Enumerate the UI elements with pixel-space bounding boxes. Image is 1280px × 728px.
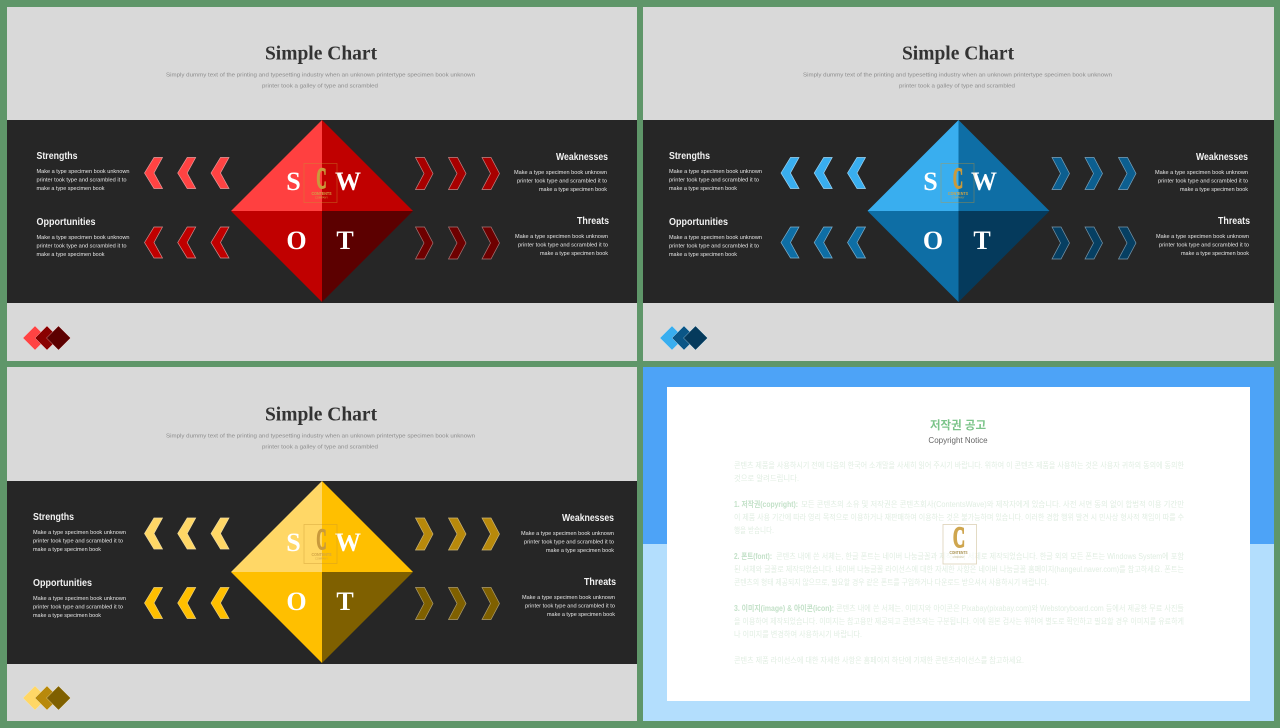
text: Opportunities: [33, 578, 126, 619]
text: Weaknesses: printer took type and scrambled it to: [517, 178, 607, 184]
text: Threats: make a type specimen book: [1181, 251, 1249, 257]
logo watermark: COMPANY: [315, 556, 328, 560]
notice clause 1: 행을 받습니다.: [734, 525, 774, 535]
logo watermark: [943, 521, 976, 564]
logo watermark: C: [953, 162, 963, 195]
notice clause 3: 나 이미지를 변경하여 사용하시기 바랍니다.: [734, 629, 862, 639]
notice title: 저작권 공고: [930, 418, 986, 432]
text: Threats: Threats: [1218, 216, 1250, 227]
SWOT diamond: [231, 120, 413, 302]
text: Opportunities: Opportunities: [36, 217, 96, 228]
arrows: right bottom: [416, 227, 500, 259]
notice subtitle: Copyright Notice: [928, 436, 988, 445]
subtitle: Simply dummy text of the printing and typesetting industry when an unknown printertype specimen book unknown: [166, 72, 475, 78]
arrows: left bottom: [144, 588, 229, 618]
text: Weaknesses: make a type specimen book: [546, 548, 614, 554]
notice clause 2: [734, 551, 1185, 587]
dark band: [643, 120, 1274, 303]
text: Opportunities: Opportunities: [33, 578, 92, 589]
text: Weaknesses: Make a type specimen book unknown: [1155, 170, 1248, 176]
arrows: left top: [144, 158, 229, 188]
SWOT diamond: S: [286, 167, 301, 196]
text: Threats: Make a type specimen book unknown: [1156, 234, 1249, 240]
text: Threats: [515, 216, 609, 257]
subtitle: printer took a galley of type and scrambled: [262, 444, 378, 450]
text: Opportunities: [36, 217, 130, 258]
SWOT diamond: O: [286, 587, 307, 616]
text: Strengths: Strengths: [669, 151, 710, 162]
text: Weaknesses: make a type specimen book: [539, 187, 607, 193]
subtitle: [166, 434, 475, 450]
SWOT diamond: T: [973, 226, 991, 255]
notice intro: [734, 460, 1185, 483]
text: Threats: printer took type and scrambled it to: [525, 604, 615, 610]
SWOT diamond: [231, 481, 413, 663]
text: Strengths: [669, 151, 762, 192]
SWOT diamond: W: [335, 167, 361, 196]
subtitle: printer took a galley of type and scrambled: [262, 84, 378, 90]
notice clause 1: 1. 저작권(copyright):: [734, 499, 798, 509]
text: Opportunities: printer took type and scrambled it to: [36, 244, 126, 250]
logo watermark: COMPANY: [315, 196, 328, 200]
notice clause 2: 콘텐츠의 형태 제공되지 않으므로, 필요할 경우 같은 폰트를 구입하거나 다운로드 받으셔서 사용하시기 바랍니다.: [734, 577, 1049, 587]
text: Weaknesses: [521, 513, 614, 554]
text: Strengths: [36, 151, 130, 192]
text: Weaknesses: printer took type and scrambled it to: [524, 540, 614, 546]
notice clause 1: 모든 콘텐츠의 소유 및 저작권은 콘텐츠회사(ContentsWave)와 제작자에게 있습니다. 사전 서면 동의 없이 합법적 이용 기간만: [801, 499, 1185, 509]
arrows: left bottom: [144, 227, 229, 258]
text: Strengths: make a type specimen book: [33, 547, 101, 553]
notice clause 3: 을 이용하여 제작되었습니다. 이미지는 참고용만 제공되고 콘텐츠와는 구분됩니다. 이에 원본 검사는 위하여 별도로 확인하고 필요할 경우 이미지를 유료하게: [734, 616, 1184, 626]
subtitle: printer took a galley of type and scrambled: [899, 84, 1015, 90]
arrows: right bottom: [416, 588, 500, 620]
text: Opportunities: [669, 217, 762, 258]
SWOT diamond: T: [336, 587, 354, 616]
arrows: left bottom: [781, 227, 866, 258]
arrows: left top: [781, 158, 866, 188]
SWOT diamond: T: [336, 226, 354, 255]
text: Opportunities: Make a type specimen book unknown: [36, 235, 130, 241]
text: Strengths: [33, 512, 126, 553]
notice clause 1: [734, 499, 1185, 535]
text: Threats: printer took type and scrambled it to: [1159, 242, 1249, 248]
text: Weaknesses: [514, 152, 608, 193]
text: Weaknesses: Make a type specimen book unknown: [514, 170, 607, 176]
text: Threats: [522, 577, 616, 618]
text: Strengths: Make a type specimen book unknown: [36, 169, 130, 175]
logo watermark: [941, 162, 974, 202]
text: Strengths: Make a type specimen book unknown: [669, 169, 762, 175]
text: Opportunities: Opportunities: [669, 217, 728, 228]
arrows: right bottom: [1052, 227, 1136, 259]
logo watermark: C: [316, 523, 326, 556]
text: Threats: printer took type and scrambled it to: [518, 242, 608, 248]
text: Threats: make a type specimen book: [540, 251, 608, 257]
text: Strengths: printer took type and scrambled it to: [36, 178, 126, 184]
panel: blue SWOT slide: [643, 7, 1274, 361]
subtitle: [166, 72, 475, 90]
SWOT diamond: W: [971, 167, 997, 196]
dark band: [7, 120, 637, 303]
subtitle: [803, 72, 1112, 90]
legend diamonds: [23, 326, 70, 350]
SWOT diamond: O: [286, 226, 307, 255]
text: Weaknesses: printer took type and scrambled it to: [1158, 178, 1248, 184]
text: Strengths: make a type specimen book: [669, 186, 737, 192]
text: Opportunities: printer took type and scrambled it to: [33, 604, 123, 610]
notice clause 3: 3. 이미지(image) & 아이콘(icon):: [734, 603, 834, 613]
notice footer line: 콘텐츠 제품 라이선스에 대한 자세한 사항은 홈페이지 하단에 기재한 콘텐츠라이선스를 참고하세요.: [734, 655, 1024, 665]
text: Opportunities: make a type specimen book: [33, 613, 101, 619]
text: Strengths: Strengths: [36, 151, 78, 162]
text: Weaknesses: make a type specimen book: [1180, 187, 1248, 193]
notice clause 2: 된 서체와 글꼴로 제작되었습니다. 네이버 나눔글꼴 라이선스에 대한 자세한 사항은 네이버 나눔글꼴 홈페이지(hangeul.naver.com)를 참고하세요. 폰트는: [734, 564, 1184, 574]
text: Threats: Make a type specimen book unknown: [515, 234, 608, 240]
heading: Simple Chart: [265, 44, 378, 64]
subtitle: Simply dummy text of the printing and typesetting industry when an unknown printertype specimen book unknown: [803, 72, 1112, 78]
logo watermark: C: [316, 162, 326, 195]
SWOT diamond: [868, 120, 1050, 302]
heading: Simple Chart: [265, 404, 378, 426]
panel: red SWOT slide: [7, 7, 637, 361]
heading: Simple Chart: [902, 44, 1015, 64]
text: Weaknesses: [1155, 152, 1248, 193]
legend diamonds: [23, 686, 70, 710]
text: Opportunities: make a type specimen book: [36, 252, 105, 258]
text: Threats: make a type specimen book: [547, 612, 615, 618]
text: Threats: [1156, 216, 1250, 257]
notice clause 3: [734, 603, 1184, 639]
arrows: right top: [416, 158, 500, 190]
text: Strengths: printer took type and scrambled it to: [669, 178, 759, 184]
text: Strengths: printer took type and scrambled it to: [33, 538, 123, 544]
text: Weaknesses: Make a type specimen book unknown: [521, 531, 614, 537]
text: Opportunities: make a type specimen book: [669, 252, 737, 258]
arrows: right top: [1052, 158, 1136, 190]
text: Weaknesses: Weaknesses: [562, 513, 614, 524]
logo watermark: CONTENTS: [312, 191, 332, 196]
panel: yellow SWOT slide: [7, 367, 637, 721]
notice clause 3: 콘텐츠 내에 쓴 서체는, 이미지와 아이콘은 Pixabay(pixabay.com)와 Webstoryboard.com 등에서 제공한 무료 사진들: [836, 603, 1184, 613]
SWOT diamond: O: [923, 226, 943, 255]
text: Threats: Threats: [577, 216, 609, 227]
text: Weaknesses: Weaknesses: [556, 152, 608, 163]
text: Strengths: make a type specimen book: [36, 186, 105, 192]
text: Strengths: Make a type specimen book unknown: [33, 530, 126, 536]
notice intro: 콘텐츠 제품을 사용하시기 전에 다음의 한국어 소개말을 사세히 읽어 주시기 바랍니다. 위하여 이 콘텐츠 제품을 사용하는 것은 사용자 귀하의 동의에 동의한: [734, 460, 1185, 470]
text: Opportunities: printer took type and scrambled it to: [669, 244, 759, 250]
logo watermark: COMPANY: [952, 196, 965, 200]
logo watermark: COMPANY: [952, 555, 965, 559]
logo watermark: CONTENTS: [312, 552, 332, 557]
text: Weaknesses: Weaknesses: [1196, 152, 1248, 163]
text: Threats: Threats: [584, 577, 616, 588]
text: Opportunities: Make a type specimen book unknown: [669, 235, 762, 241]
text: Threats: Make a type specimen book unknown: [522, 595, 615, 601]
SWOT diamond: S: [923, 167, 938, 196]
text: Opportunities: Make a type specimen book unknown: [33, 596, 126, 602]
logo watermark: CONTENTS: [950, 550, 968, 555]
dark band: [7, 481, 637, 664]
logo watermark: CONTENTS: [948, 191, 968, 196]
SWOT diamond: S: [286, 528, 301, 557]
panel: copyright notice: [643, 367, 1274, 721]
notice clause 1: 이 제품 사용 기간에 따라 영리 목적으로 이용하거나 재판매하여 이용하는 것은 불가능하며 있습니다. 이러한 경합 행위 발견 시 민사상 형사적 책임이 따를 수: [734, 512, 1184, 522]
legend diamonds: [660, 326, 708, 350]
arrows: left top: [144, 518, 229, 549]
arrows: right top: [416, 518, 500, 550]
SWOT diamond: W: [335, 528, 361, 557]
logo watermark: [304, 162, 337, 202]
subtitle: Simply dummy text of the printing and typesetting industry when an unknown printertype specimen book unknown: [166, 434, 475, 440]
notice intro: 것으로 알려드립니다.: [734, 473, 799, 483]
notice clause 2: 콘텐츠 내에 쓴 서체는, 한글 폰트는 네이버 나눔글꼴과 제작자의 서체로 제작되었습니다. 한글 외의 모든 폰트는 Windows System에 포함: [776, 551, 1185, 561]
logo watermark: C: [953, 521, 965, 554]
text: Strengths: Strengths: [33, 512, 74, 523]
notice clause 2: 2. 폰트(font):: [734, 552, 772, 561]
logo watermark: [304, 523, 337, 564]
